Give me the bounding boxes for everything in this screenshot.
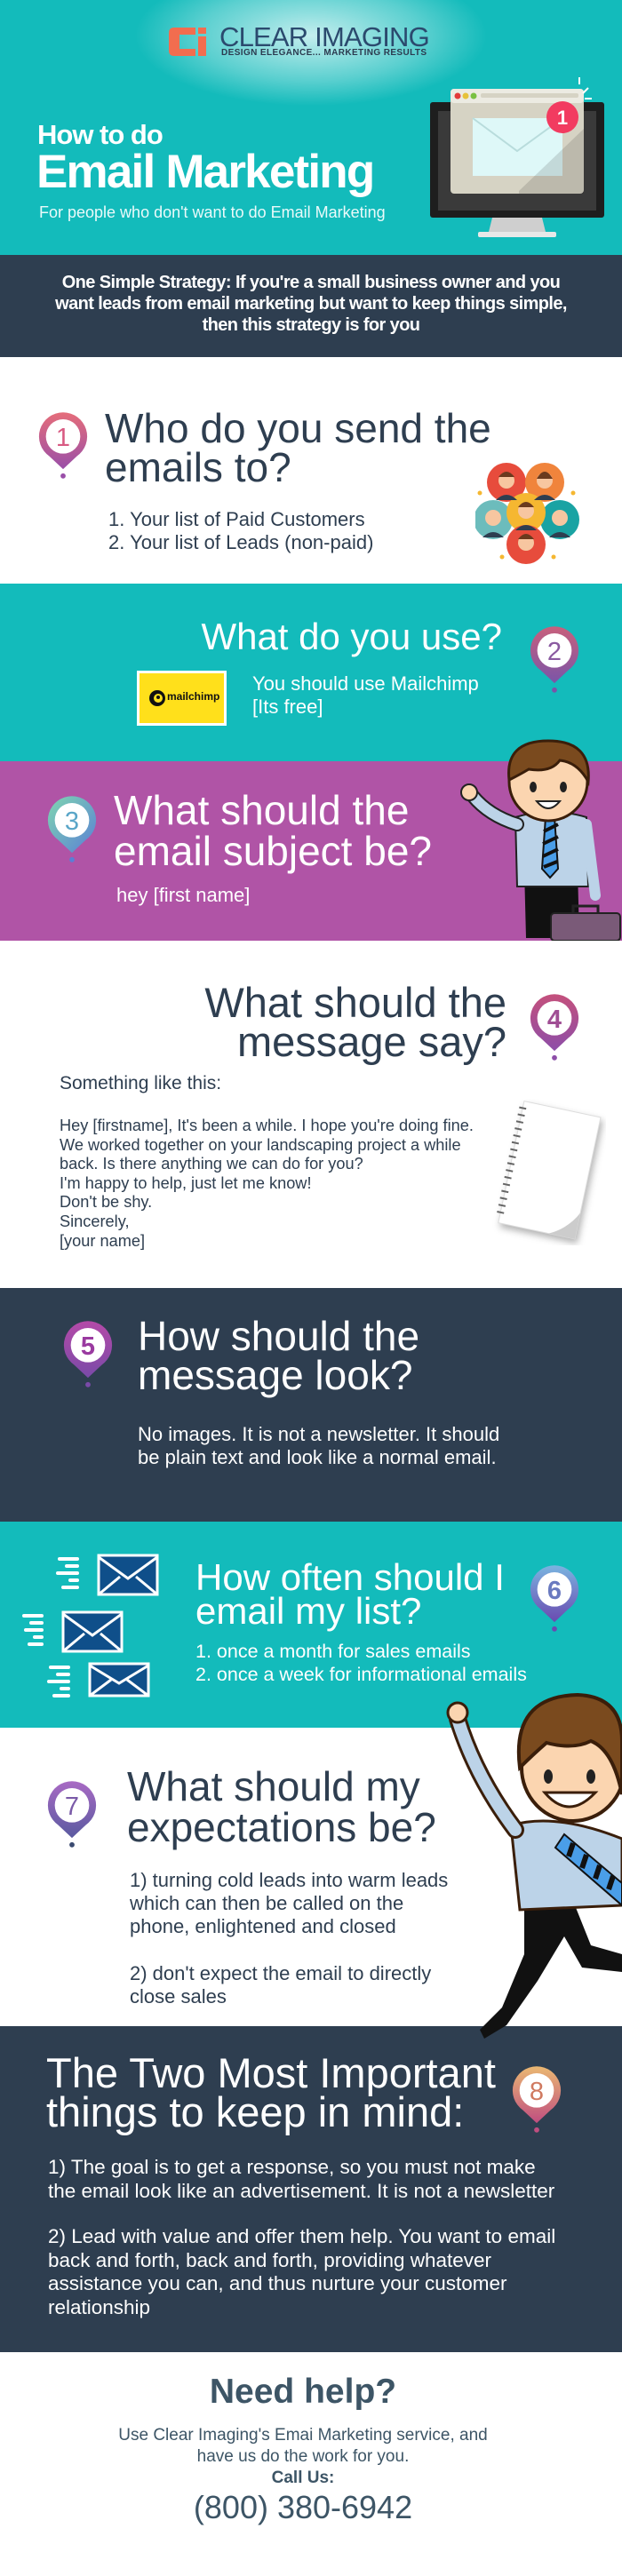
- title 4: [204, 979, 506, 1065]
- text 5: No images. It is not a newsletter. It should: [138, 1423, 499, 1445]
- heading: email marketing: Email Marketing: [36, 146, 373, 198]
- icon: monitor with email: 1: [557, 107, 568, 129]
- title 8: things to keep in mind:: [46, 2088, 464, 2135]
- text 7a: phone, enlightened and closed: [130, 1915, 396, 1937]
- title 8: [46, 2049, 496, 2135]
- text 8b: back and forth, back and forth, providing whatever: [48, 2249, 491, 2270]
- title 6: email my list?: [195, 1590, 421, 1632]
- icon: pin 4: [530, 994, 579, 1061]
- header panel: [0, 0, 622, 255]
- list 1: 1. Your list of Paid Customers: [108, 508, 365, 530]
- email sample: Don't be shy.: [60, 1193, 152, 1211]
- icon: pin 6: 6: [547, 1577, 562, 1605]
- logo: [169, 21, 429, 58]
- footer text: [118, 2426, 488, 2466]
- panel 3: email subject: [0, 761, 622, 941]
- logo glow: [133, 0, 489, 107]
- title 3: [114, 787, 432, 874]
- icon: pin 5: 5: [81, 1332, 95, 1361]
- title 1: emails to?: [105, 444, 291, 490]
- strategy text: [55, 273, 567, 335]
- text 5: be plain text and look like a normal email.: [138, 1446, 497, 1468]
- text 8b: 2) Lead with value and offer them help. You want to email: [48, 2225, 555, 2247]
- text 7a: 1) turning cold leads into warm leads: [130, 1869, 448, 1891]
- icon: pin 4: 4: [547, 1006, 562, 1034]
- list 1: 2. Your list of Leads (non-paid): [108, 531, 373, 553]
- title 5: [138, 1313, 419, 1398]
- mailchimp logo: mailchimp: [167, 690, 219, 703]
- icon: people group: [475, 463, 579, 564]
- text 3: hey [first name]: [116, 884, 250, 906]
- icon: pin 1: 1: [56, 424, 70, 452]
- text 2: [252, 672, 479, 718]
- phone number: (800) 380-6942: [194, 2489, 412, 2525]
- icon: pin 3: 3: [65, 807, 79, 836]
- title 7: [127, 1763, 436, 1850]
- icon: notebook: [497, 1101, 606, 1245]
- icon: pin 5: [64, 1321, 112, 1387]
- title 7: What should my: [127, 1763, 420, 1809]
- panel 2: what do you use: [0, 584, 622, 761]
- title 7: expectations be?: [127, 1804, 436, 1850]
- text 7b: close sales: [130, 1985, 227, 2008]
- text 5: [138, 1423, 499, 1468]
- title 2: What do you use?: [201, 616, 502, 657]
- footer text: have us do the work for you.: [197, 2447, 409, 2466]
- title 6: How often should I: [195, 1556, 505, 1598]
- title 4: What should the: [204, 979, 506, 1026]
- text 8b: [48, 2225, 555, 2318]
- panel 7: expectations: [0, 1728, 622, 2026]
- text 7b: 2) don't expect the email to directly: [130, 1962, 431, 1984]
- subtitle: For people who don't want to do Email Marketing: [39, 203, 386, 221]
- icon: pin 7: 7: [65, 1793, 79, 1821]
- logo text: CLEAR IMAGING: [219, 21, 429, 52]
- illustration: waving businessman: [460, 739, 621, 941]
- icon: pin 7: [48, 1781, 96, 1848]
- icon: pin 8: 8: [530, 2078, 544, 2106]
- call us: Call Us:: [272, 2469, 334, 2487]
- email sample: Hey [firstname], It's been a while. I hope you're doing fine.: [60, 1117, 474, 1134]
- title 6: [195, 1556, 505, 1632]
- title 8: The Two Most Important: [46, 2049, 496, 2096]
- text 8a: 1) The goal is to get a response, so you must not make: [48, 2156, 536, 2178]
- email sample: I'm happy to help, just let me know!: [60, 1174, 311, 1192]
- footer: need help: [0, 2352, 622, 2576]
- title 5: How should the: [138, 1313, 419, 1359]
- title 4: message say?: [237, 1018, 506, 1065]
- strategy banner: [0, 255, 622, 357]
- text 8a: the email look like an advertisement. It is not a newsletter: [48, 2180, 554, 2202]
- icon: pin 8: [512, 2066, 562, 2133]
- email sample: back. Is there anything we can do for you?: [60, 1155, 363, 1173]
- email sample: We worked together on your landscaping project a while: [60, 1136, 461, 1154]
- text 7b: [130, 1962, 432, 2008]
- text 8a: [48, 2156, 554, 2202]
- footer heading: Need help?: [210, 2373, 396, 2411]
- list 6: [195, 1641, 527, 1685]
- panel 8: two most important: [0, 2026, 622, 2352]
- icon: pin 3: [48, 796, 96, 863]
- panel 4: message say: [0, 941, 622, 1288]
- illustration: jumping businessman: [446, 1693, 622, 2039]
- text 8b: assistance you can, and thus nurture your customer: [48, 2272, 507, 2294]
- heading: how to do: How to do: [37, 119, 163, 150]
- icon: pin 2: 2: [547, 638, 562, 666]
- email sample: Sincerely,: [60, 1212, 130, 1230]
- text 7a: which can then be called on the: [130, 1892, 403, 1914]
- icon: pin 6: [530, 1565, 579, 1632]
- footer text: Use Clear Imaging's Emai Marketing service, and: [118, 2426, 488, 2445]
- icon: flying envelopes: [22, 1554, 158, 1697]
- text 2: You should use Mailchimp: [252, 672, 479, 695]
- icon: pin 2: [530, 626, 579, 693]
- icon: monitor with email: [430, 77, 604, 237]
- text 8b: relationship: [48, 2295, 150, 2318]
- title 3: What should the: [114, 787, 409, 833]
- mailchimp logo: [137, 671, 227, 726]
- strategy text: One Simple Strategy: If you're a small business owner and you: [62, 273, 560, 292]
- text 7a: [130, 1869, 448, 1937]
- list 6: 1. once a month for sales emails: [195, 1641, 471, 1662]
- list 6: 2. once a week for informational emails: [195, 1664, 527, 1685]
- icon: pin 1: [39, 412, 87, 479]
- email sample: [your name]: [60, 1232, 145, 1250]
- panel 6: how often: [0, 1522, 622, 1728]
- panel 5: message look: [0, 1288, 622, 1522]
- strategy text: want leads from email marketing but want to keep things simple,: [55, 294, 567, 314]
- icon: logo mark: [169, 28, 206, 56]
- email sample: [60, 1117, 474, 1250]
- title 1: [105, 405, 491, 490]
- text 2: [Its free]: [252, 696, 323, 718]
- strategy text: then this strategy is for you: [203, 315, 419, 335]
- list 1: [108, 508, 373, 553]
- tagline: DESIGN ELEGANCE... MARKETING RESULTS: [221, 48, 427, 58]
- title 3: email subject be?: [114, 828, 432, 874]
- panel 1: who do you send to: [0, 357, 622, 584]
- intro text: Something like this:: [60, 1073, 221, 1093]
- title 1: Who do you send the: [105, 405, 491, 451]
- title 5: message look?: [138, 1352, 412, 1398]
